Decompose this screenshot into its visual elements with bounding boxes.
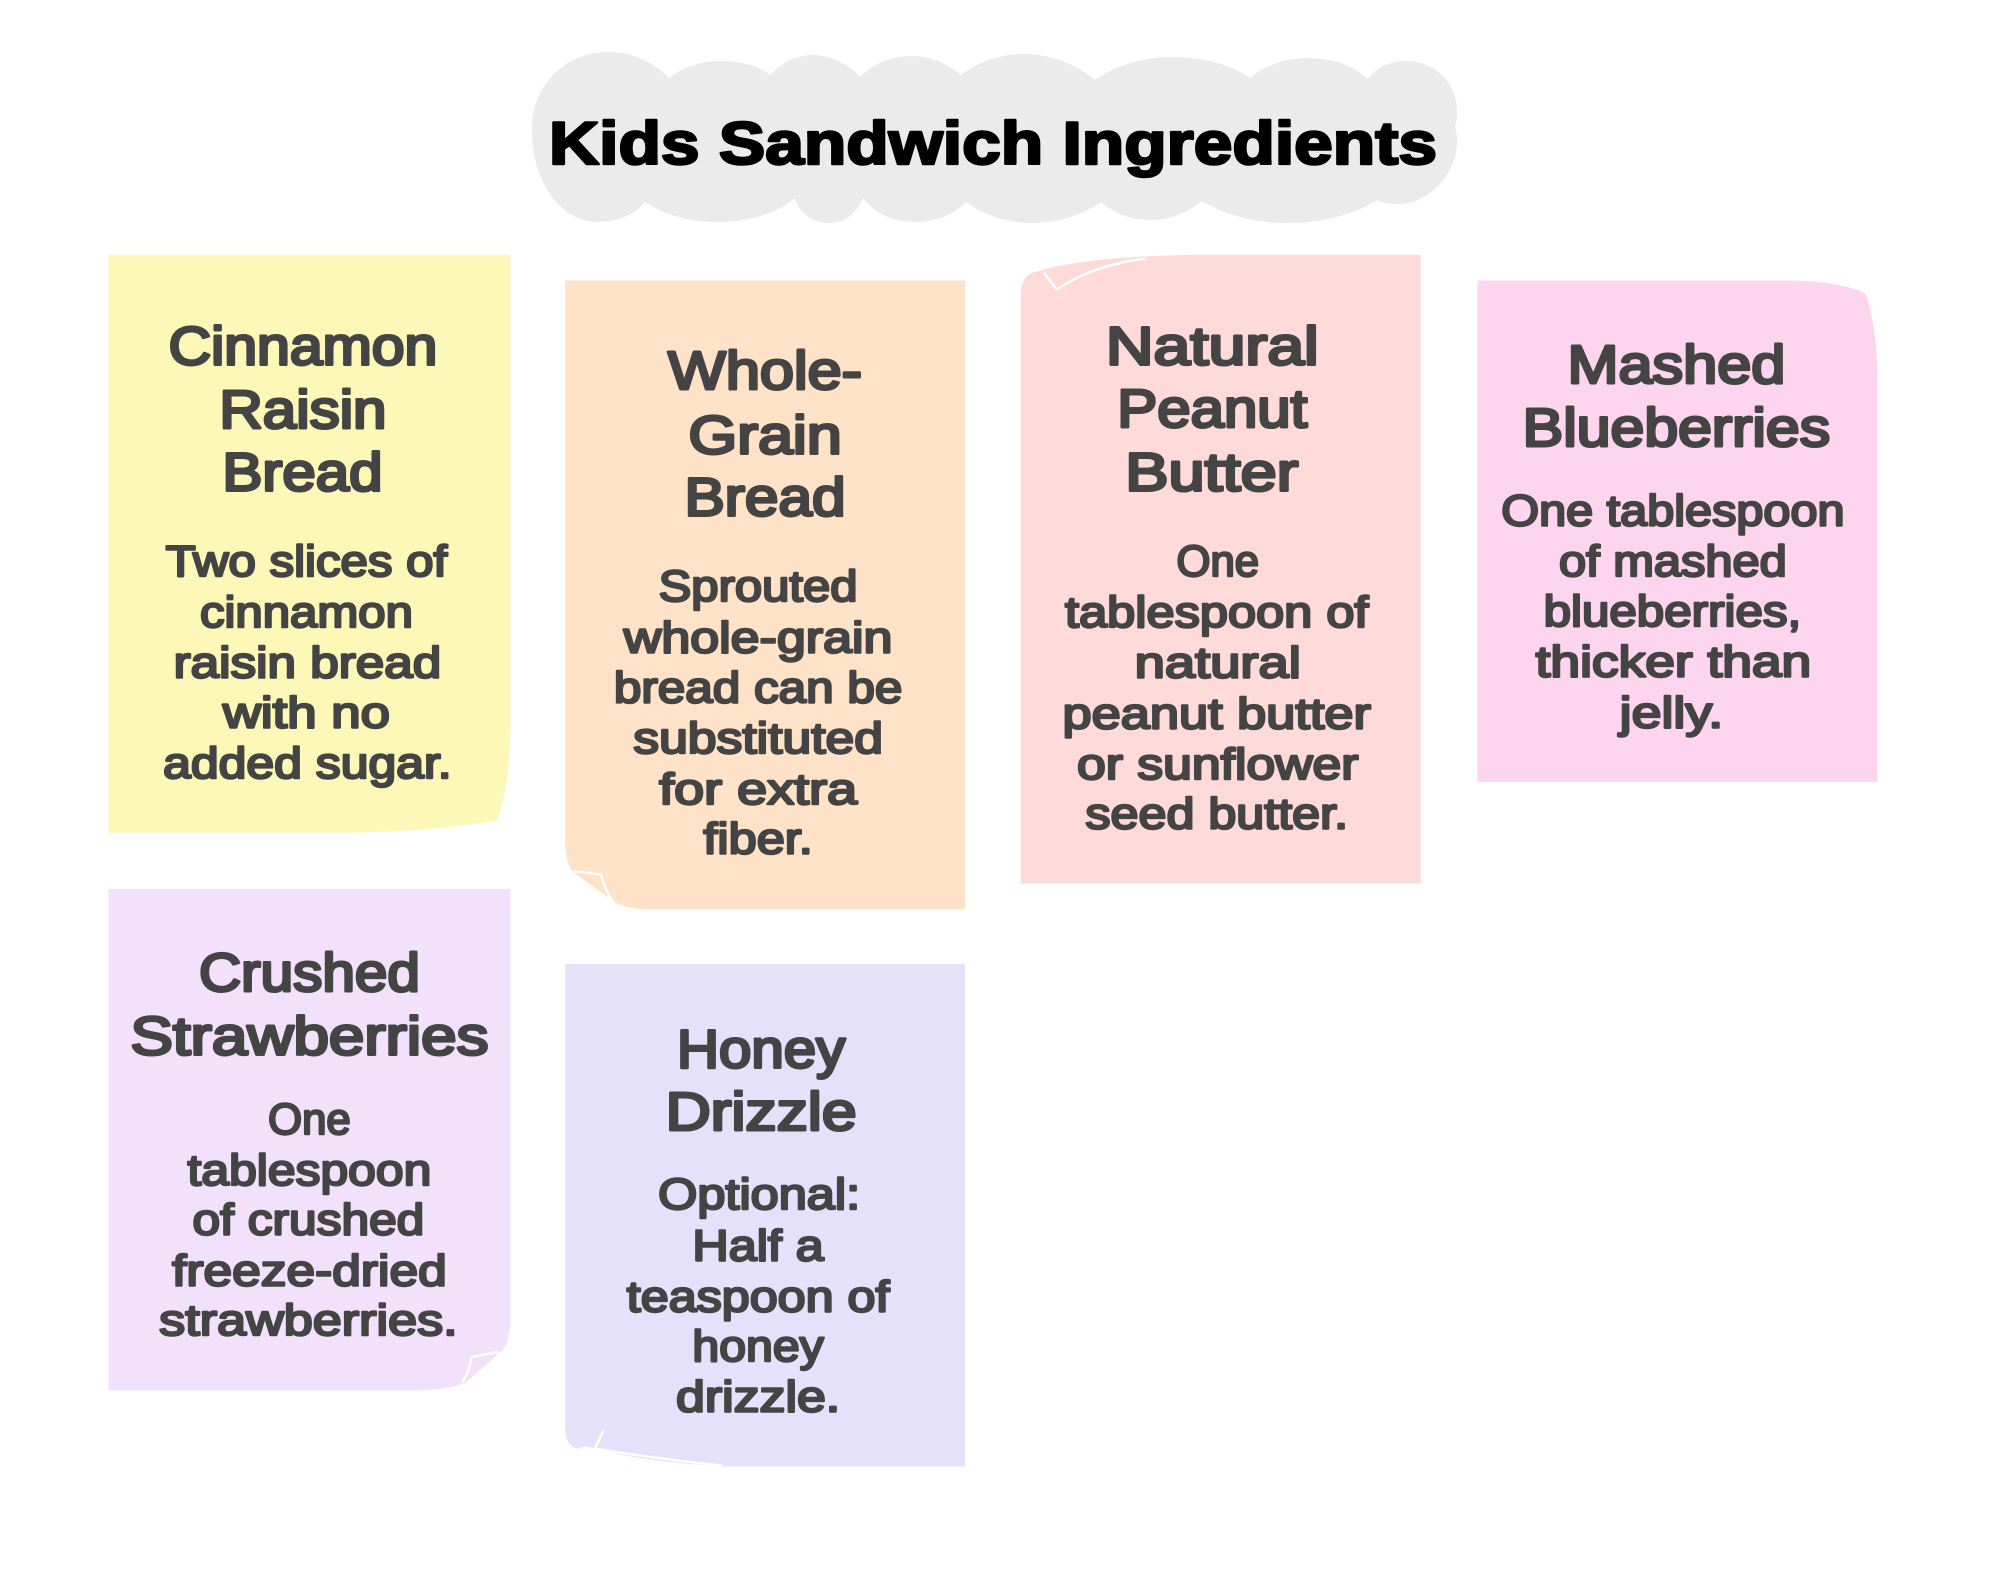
text: whole-grain bread description: Sprouted [659, 562, 858, 611]
text: honey drizzle description: Optional: [658, 1170, 860, 1219]
text: natural peanut butter description [1063, 537, 1371, 839]
text: natural peanut butter description: seed butter. [1085, 790, 1348, 839]
text: honey drizzle description [627, 1170, 890, 1422]
text: crushed strawberries description: of crushed [193, 1196, 424, 1245]
panel: natural peanut butter [1021, 255, 1421, 883]
title banner [532, 52, 1457, 223]
panel: whole-grain bread [565, 281, 965, 909]
heading: honey drizzle: Drizzle [666, 1082, 857, 1142]
text: crushed strawberries description [159, 1095, 458, 1345]
ingredient cards [108, 255, 1877, 1466]
text: crushed strawberries description: strawberries. [159, 1296, 458, 1345]
text: cinnamon raisin bread description: added sugar. [163, 739, 452, 788]
panel: cinnamon raisin bread [108, 255, 510, 833]
heading: natural peanut butter: Butter [1125, 442, 1298, 502]
heading: honey drizzle: Honey [677, 1020, 845, 1080]
text: cinnamon raisin bread description [163, 537, 452, 788]
text: mashed blueberries description: One tablespoon [1501, 486, 1845, 535]
text: cinnamon raisin bread description: cinnamon [200, 588, 413, 637]
text: natural peanut butter description: tablespoon of [1065, 588, 1369, 637]
text: crushed strawberries description: freeze-dried [172, 1246, 447, 1295]
panel: mashed blueberries [1477, 281, 1877, 782]
text: whole-grain bread description: fiber. [703, 815, 813, 864]
heading: crushed strawberries: Crushed [199, 943, 420, 1003]
text: cinnamon raisin bread description: Two slices of [166, 537, 448, 586]
heading: whole-grain bread: Bread [684, 467, 846, 527]
text: honey drizzle description: drizzle. [676, 1373, 840, 1422]
panel: crushed strawberries [108, 889, 510, 1390]
text: cinnamon raisin bread description: with no [222, 688, 390, 737]
text: whole-grain bread description [614, 562, 902, 864]
text: natural peanut butter description: or sunflower [1077, 740, 1359, 789]
text: mashed blueberries description [1501, 486, 1845, 737]
text: whole-grain bread description: for extra [659, 765, 858, 814]
heading: cinnamon raisin bread [169, 317, 437, 502]
text: crushed strawberries description: tablespoon [188, 1146, 431, 1195]
text: natural peanut butter description: One [1176, 537, 1259, 586]
text: whole-grain bread description: substituted [633, 714, 883, 763]
title cloud background [532, 52, 1457, 223]
heading: cinnamon raisin bread: Raisin [219, 380, 387, 440]
text: honey drizzle description: honey [692, 1322, 824, 1371]
heading: natural peanut butter: Peanut [1117, 379, 1307, 439]
text: mashed blueberries description: blueberries, [1544, 587, 1801, 636]
heading: cinnamon raisin bread: Bread [222, 442, 383, 502]
heading: mashed blueberries [1523, 335, 1830, 458]
text: crushed strawberries description: One [268, 1095, 351, 1144]
heading: cinnamon raisin bread: Cinnamon [169, 317, 437, 377]
text: honey drizzle description: Half a [692, 1222, 825, 1271]
heading: mashed blueberries: Mashed [1567, 335, 1785, 395]
text: cinnamon raisin bread description: raisin bread [174, 639, 441, 688]
heading: honey drizzle [666, 1020, 857, 1142]
heading: crushed strawberries: Strawberries [130, 1007, 488, 1067]
text: honey drizzle description: teaspoon of [627, 1272, 890, 1321]
heading: whole-grain bread: Grain [688, 406, 842, 466]
text: whole-grain bread description: whole-grain [623, 614, 892, 663]
heading: whole-grain bread: Whole- [668, 341, 862, 401]
heading: natural peanut butter: Natural [1106, 317, 1319, 377]
heading: natural peanut butter [1106, 317, 1319, 502]
heading: mashed blueberries: Blueberries [1523, 398, 1830, 458]
title text: Kids Sandwich Ingredients [549, 110, 1437, 177]
panel: honey drizzle [565, 964, 965, 1466]
text: mashed blueberries description: of mashed [1559, 537, 1787, 586]
text: mashed blueberries description: thicker than [1536, 638, 1811, 687]
text: whole-grain bread description: bread can be [614, 663, 902, 712]
heading: crushed strawberries [130, 943, 488, 1067]
text: mashed blueberries description: jelly. [1617, 688, 1723, 737]
heading: whole-grain bread [668, 341, 862, 527]
text: natural peanut butter description: peanut butter [1063, 689, 1371, 738]
text: natural peanut butter description: natural [1135, 639, 1301, 688]
